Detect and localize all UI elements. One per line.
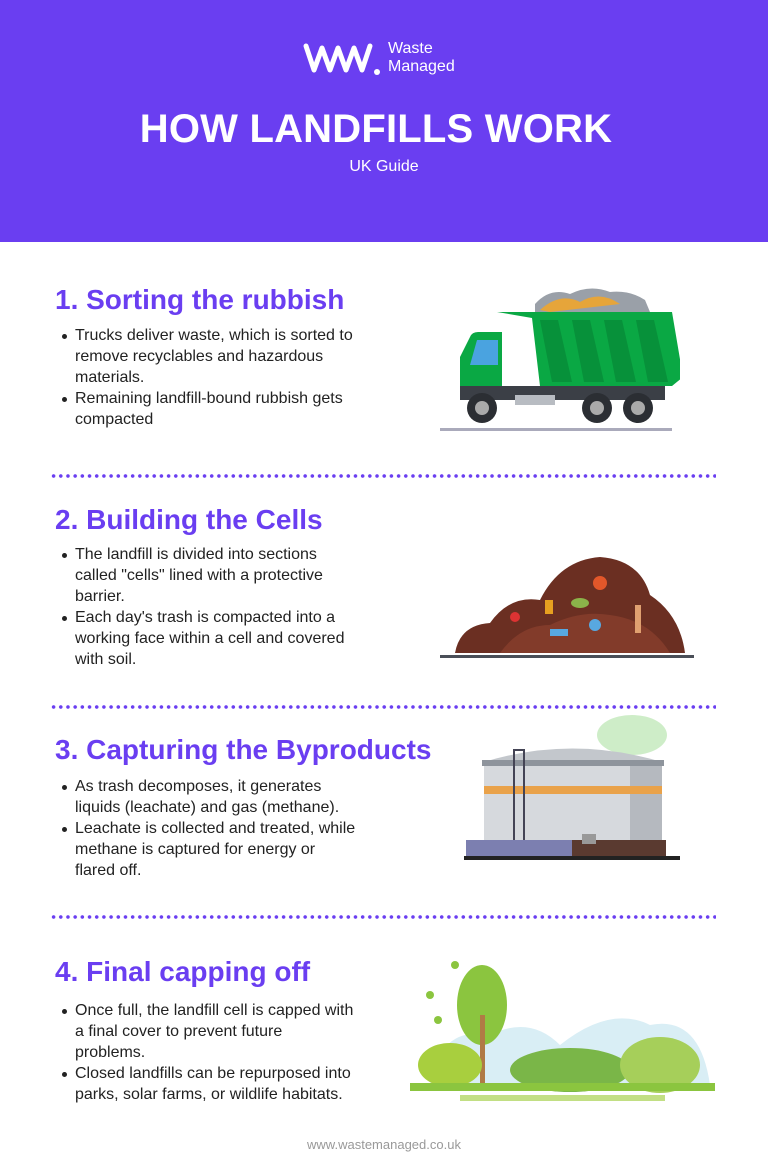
- heading 3: 3. Capturing the Byproducts: [55, 734, 431, 765]
- bullets 3: [62, 778, 355, 879]
- heading 2: 2. Building the Cells: [55, 504, 323, 535]
- panel: cells: [55, 504, 694, 668]
- bullets 4: problems.: [75, 1044, 145, 1061]
- bullets 4: Once full, the landfill cell is capped with: [75, 1002, 353, 1019]
- panel: capping: [55, 956, 715, 1103]
- icon: storage tank: [464, 715, 680, 860]
- bullets 3: methane is captured for energy or: [75, 841, 315, 858]
- logo: [304, 40, 455, 75]
- bullets 2: barrier.: [75, 588, 125, 605]
- bullets 4: a final cover to prevent future: [75, 1023, 282, 1040]
- bullets 3: liquids (leachate) and gas (methane).: [75, 799, 339, 816]
- panel: byproducts: [55, 715, 680, 879]
- logo: Managed: [388, 58, 455, 75]
- bullets 1: Trucks deliver waste, which is sorted to: [75, 327, 353, 344]
- heading 4: 4. Final capping off: [55, 956, 310, 987]
- bullets 3: As trash decomposes, it generates: [75, 778, 321, 795]
- bullets 1: materials.: [75, 369, 144, 386]
- bullets 2: Each day's trash is compacted into a: [75, 609, 335, 626]
- bullets 4: [62, 1002, 353, 1103]
- icon: waste heap: [440, 557, 694, 658]
- bullets 4: Closed landfills can be repurposed into: [75, 1065, 351, 1082]
- icon: green park: [410, 961, 715, 1101]
- bullets 1: Remaining landfill-bound rubbish gets: [75, 390, 343, 407]
- footer: www.wastemanaged.co.uk: [307, 1137, 461, 1152]
- bullets 2: with soil.: [75, 651, 136, 668]
- bullets 4: parks, solar farms, or wildlife habitats.: [75, 1086, 343, 1103]
- bullets 2: The landfill is divided into sections: [75, 546, 317, 563]
- title: HOW LANDFILLS WORK: [140, 107, 612, 151]
- bullets 3: flared off.: [75, 862, 141, 879]
- heading 1: 1. Sorting the rubbish: [55, 284, 344, 315]
- logo: Waste: [388, 40, 433, 57]
- bullets 1: [62, 327, 353, 428]
- icon: truck: [440, 288, 680, 431]
- bullets 1: remove recyclables and hazardous: [75, 348, 323, 365]
- bullets 2: working face within a cell and covered: [75, 630, 344, 647]
- header: [0, 0, 768, 242]
- panel: sorting: [55, 284, 680, 431]
- bullets 2: called "cells" lined with a protective: [75, 567, 323, 584]
- bullets 2: [62, 546, 344, 668]
- bullets 1: compacted: [75, 411, 153, 428]
- bullets 3: Leachate is collected and treated, while: [75, 820, 355, 837]
- subtitle: UK Guide: [349, 158, 419, 175]
